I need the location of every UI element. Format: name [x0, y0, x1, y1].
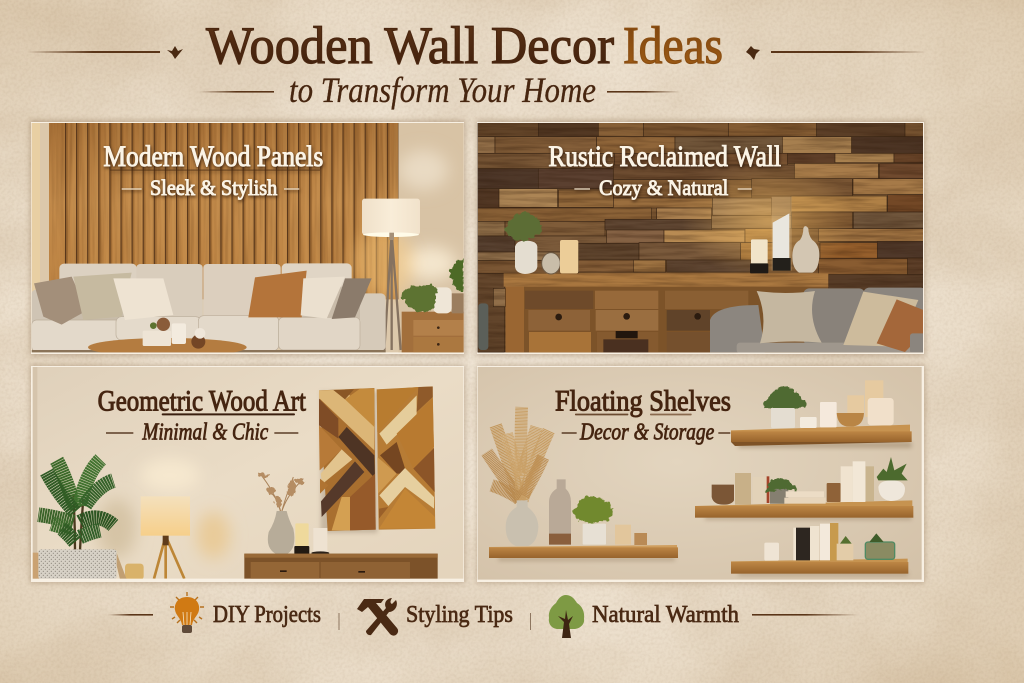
heading: Wooden Wall Decor: Wooden Wall Decor: [206, 17, 614, 75]
shelf: bottom: [731, 559, 908, 576]
sofa: [32, 263, 386, 353]
subtitle text: to Transform Your Home: [289, 70, 596, 110]
shelf: top items: [763, 380, 894, 428]
icon: right ornament: [746, 46, 760, 60]
footer strip: [108, 592, 859, 638]
wood cabinet: [244, 554, 438, 580]
label: Minimal & Chic: Minimal & Chic: [142, 420, 269, 446]
dried stems in vase: [258, 473, 329, 555]
label: Modern Wood Panels: Modern Wood Panels: [103, 141, 323, 173]
label: Rustic Reclaimed Wall: [548, 141, 781, 200]
wood art: left panel: [319, 388, 377, 533]
label: Floating Shelves: Floating Shelves: [555, 385, 731, 417]
label: Rustic Reclaimed Wall: Rustic Reclaimed Wall: [548, 141, 781, 173]
panel: Modern Wood Panels: [30, 120, 470, 360]
chair: [33, 549, 144, 580]
plant: palm: [38, 459, 113, 550]
panel: Rustic Reclaimed Wall: [475, 120, 927, 360]
shelf: left: [489, 545, 678, 561]
mantel decor: [505, 197, 819, 274]
shelf: bottom items: [764, 523, 895, 561]
left shelf items: [549, 479, 647, 545]
shelf: middle: [695, 500, 913, 520]
wood slat wall: [49, 123, 413, 300]
label: Cozy & Natural: Cozy & Natural: [599, 175, 728, 200]
rustic console cabinet: [478, 273, 828, 353]
panel: Geometric Wood Art: [30, 362, 470, 584]
icon: hammer and wrench: [357, 598, 398, 636]
coffee table with books: [88, 318, 247, 352]
title rule: left: [26, 51, 160, 53]
label: Styling Tips: Styling Tips: [406, 602, 513, 628]
shelf: middle items: [712, 457, 908, 505]
wood art: right panel: [377, 386, 435, 530]
panel: Floating Shelves: [475, 362, 925, 584]
label: Modern Wood Panels: [103, 141, 323, 200]
label: DIY Projects: DIY Projects: [213, 602, 321, 628]
icon: light bulb: [170, 592, 204, 633]
floor lamp: [362, 199, 420, 350]
label: Sleek & Stylish: Sleek & Stylish: [150, 175, 278, 200]
shelf: top: [731, 425, 912, 448]
label: Geometric Wood Art: Geometric Wood Art: [98, 385, 306, 417]
reclaimed plank wall: [475, 120, 925, 360]
title rule: right: [771, 51, 927, 53]
label: Geometric Wood Art: [98, 385, 306, 446]
table lamp: [141, 496, 190, 579]
grey sofa: [710, 288, 927, 353]
icon: tree: [549, 595, 584, 638]
panel shadows: [30, 120, 925, 583]
icon: left ornament: [167, 46, 183, 59]
label: Decor & Storage: Decor & Storage: [579, 420, 715, 446]
sofa pillows: [34, 271, 372, 325]
pampas grass in vase: [487, 407, 549, 546]
heading: Ideas: Ideas: [623, 17, 723, 75]
label: Floating Shelves: [555, 385, 731, 446]
title: [26, 17, 927, 75]
side table with plant: [402, 258, 465, 353]
label: Natural Warmth: Natural Warmth: [592, 602, 739, 628]
